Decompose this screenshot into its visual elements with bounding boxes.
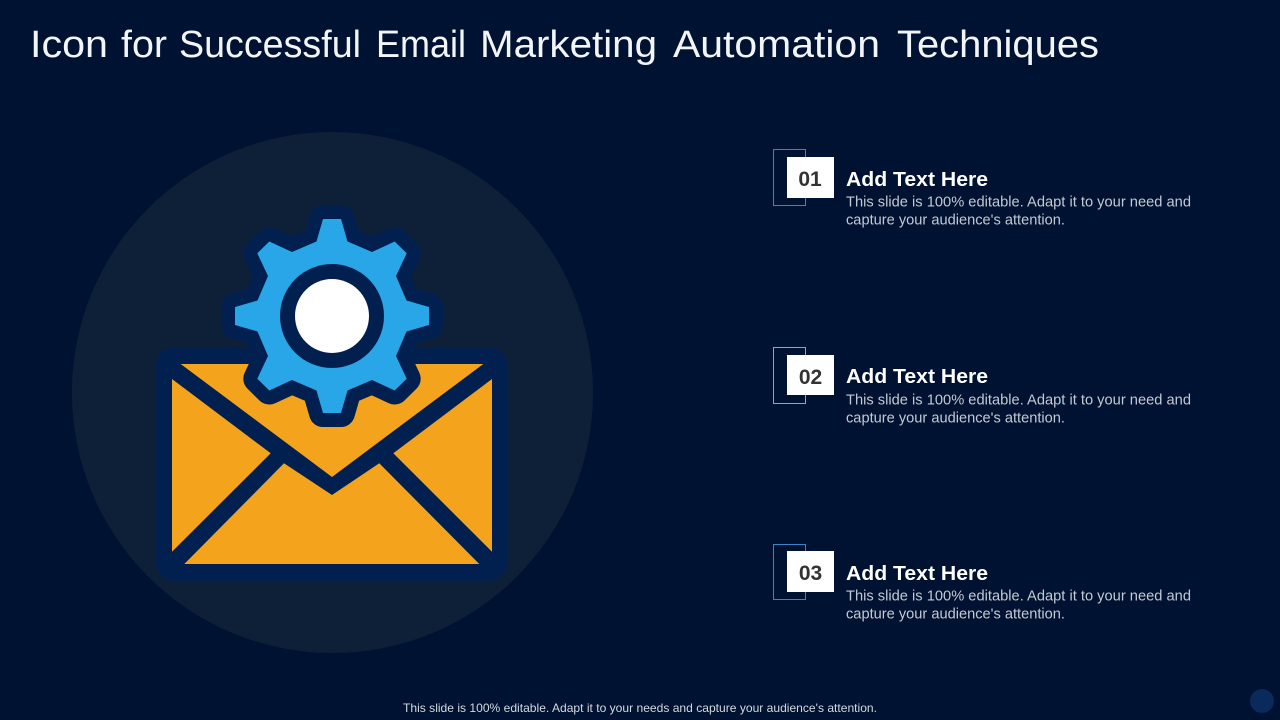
number badge 01: 01 [798,168,822,191]
title: Successful [179,24,361,66]
text block 03 [846,588,1191,622]
title: Marketing [480,24,657,66]
number badge 03: 03 [799,562,822,585]
gear [235,219,429,413]
text block 03: capture your audience's attention. [846,606,1065,622]
envelope [155,347,508,581]
text block 02: capture your audience's attention. [846,410,1065,426]
text block 01: This slide is 100% editable. Adapt it to your need and [846,194,1191,210]
number badge 02: 02 [799,366,822,389]
number badge 03 [774,544,834,600]
heading 01: Add Text Here [846,168,988,191]
title: Icon [30,24,108,66]
number badge 01 [774,150,834,206]
item 01 [774,150,1191,228]
title: for [121,24,167,66]
text block 02: This slide is 100% editable. Adapt it to your need and [846,392,1191,408]
item 02 [774,348,1191,426]
corner dot [1250,689,1274,713]
item 03 [774,544,1191,622]
title: Automation [673,24,880,66]
number badge 02 [774,348,834,404]
text block 02 [846,392,1191,426]
text block 01 [846,194,1191,228]
footer note: This slide is 100% editable. Adapt it to your needs and capture your audience's attention. [403,701,877,715]
icon backdrop circle [72,132,593,653]
title: Techniques [897,24,1099,66]
icon: email envelope with gear [155,219,508,581]
title: Email [376,24,466,66]
text block 03: This slide is 100% editable. Adapt it to your need and [846,588,1191,604]
text block 01: capture your audience's attention. [846,212,1065,228]
title [30,24,1099,66]
heading 02: Add Text Here [846,365,988,388]
heading 03: Add Text Here [846,562,988,585]
